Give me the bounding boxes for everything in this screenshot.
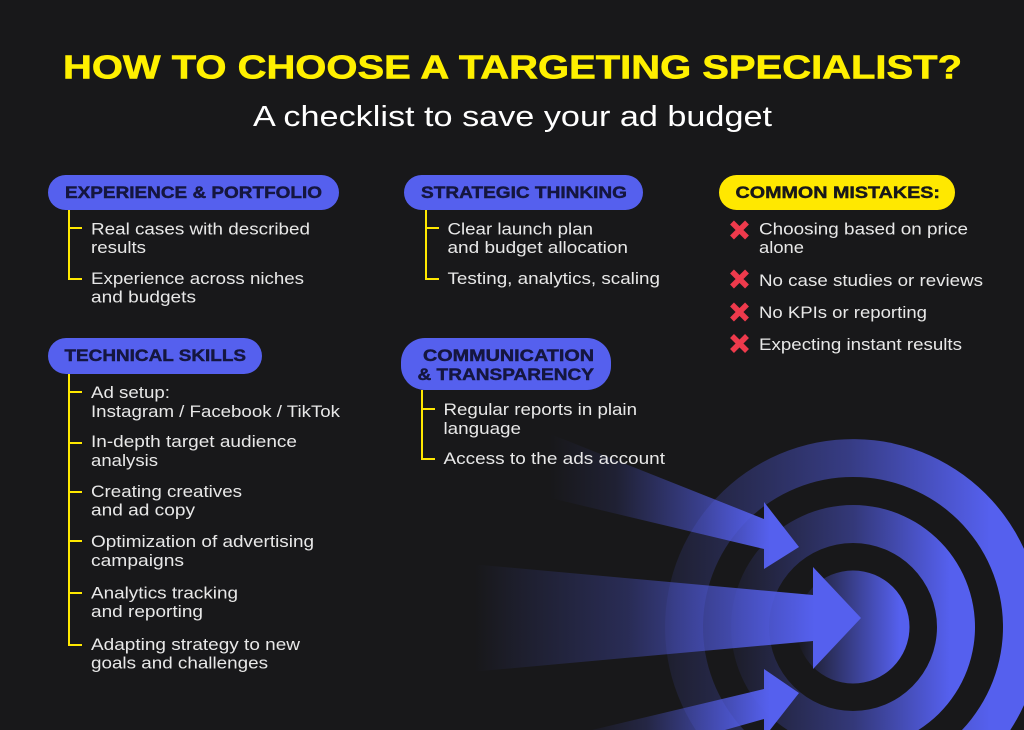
list item: Optimization of advertising — [91, 533, 314, 551]
heading pill: COMMON MISTAKES: — [736, 183, 940, 202]
list item: Clear launch plan — [448, 220, 593, 238]
heading pill — [48, 175, 339, 210]
list item: Ad setup: — [91, 384, 170, 402]
arrow: lower — [592, 669, 799, 730]
illustration: target with arrows — [470, 414, 1024, 730]
heading pill — [401, 338, 611, 390]
bracket connector — [422, 390, 435, 459]
list item: Access to the ads account — [444, 450, 666, 468]
bracket connector — [426, 210, 439, 279]
list item: and budget allocation — [448, 239, 628, 257]
arrow: upper — [500, 414, 799, 569]
list item: Regular reports in plain — [444, 401, 637, 419]
heading pill: COMMUNICATION — [423, 346, 594, 365]
mistake text: Expecting instant results — [759, 336, 962, 354]
mistake text: Choosing based on price — [759, 220, 968, 238]
icon: red cross — [732, 304, 747, 320]
list item: Testing, analytics, scaling — [448, 270, 660, 288]
mistake text: No KPIs or reporting — [759, 304, 927, 322]
subtitle: A checklist to save your ad budget — [253, 101, 772, 133]
heading pill: STRATEGIC THINKING — [421, 183, 627, 202]
heading pill: TECHNICAL SKILLS — [64, 346, 246, 365]
list item: Instagram / Facebook / TikTok — [91, 403, 341, 421]
list item: language — [444, 420, 521, 438]
list item: Analytics tracking — [91, 584, 238, 602]
list item: analysis — [91, 452, 158, 470]
list item: results — [91, 239, 146, 257]
target outer ring — [665, 439, 1024, 730]
panel: technical skills — [48, 338, 341, 672]
icon: red cross — [732, 336, 747, 351]
heading pill: EXPERIENCE & PORTFOLIO — [65, 183, 322, 202]
icon: red cross — [732, 222, 747, 238]
list item: goals and challenges — [91, 654, 268, 672]
panel: communication and transparency — [401, 338, 666, 468]
target middle ring — [731, 505, 975, 730]
list item: and budgets — [91, 288, 196, 306]
list item: and ad copy — [91, 502, 196, 520]
heading pill — [48, 338, 262, 374]
bracket connector — [69, 210, 82, 279]
heading pill — [404, 175, 643, 210]
list item: Creating creatives — [91, 483, 242, 501]
panel: strategic thinking — [404, 175, 660, 288]
mistake text: No case studies or reviews — [759, 272, 983, 290]
list item: and reporting — [91, 603, 203, 621]
panel: experience and portfolio — [48, 175, 339, 306]
panel: common mistakes — [719, 175, 983, 354]
list item: In-depth target audience — [91, 433, 297, 451]
list item: Real cases with described — [91, 220, 310, 238]
title: HOW TO CHOOSE A TARGETING SPECIALIST? — [63, 50, 962, 86]
arrow: middle — [470, 564, 861, 672]
mistake text: alone — [759, 239, 804, 257]
icon: red cross — [732, 272, 747, 286]
heading pill: & TRANSPARENCY — [418, 365, 594, 384]
list item: Adapting strategy to new — [91, 636, 300, 654]
bracket connector — [69, 374, 82, 645]
heading pill — [719, 175, 955, 210]
list item: Experience across niches — [91, 270, 304, 288]
target bullseye — [796, 570, 910, 684]
list item: campaigns — [91, 552, 184, 570]
